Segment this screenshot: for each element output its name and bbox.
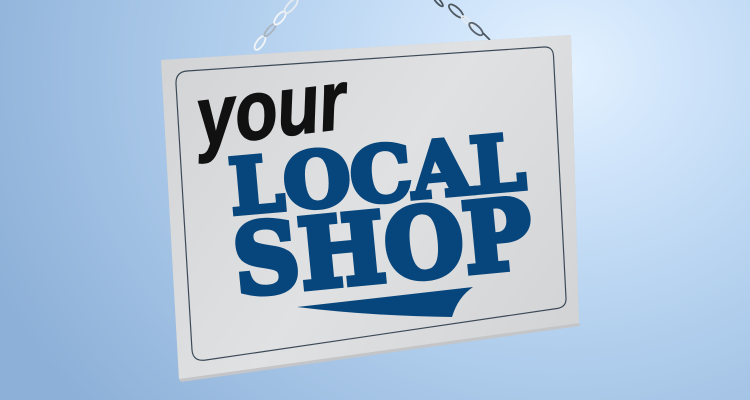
right chain (432, 0, 490, 40)
sign board (161, 35, 580, 382)
board edge (161, 35, 580, 382)
swoosh underline (297, 287, 473, 317)
left chain (253, 0, 300, 52)
board face (161, 35, 579, 379)
word: SHOP: SHOP (228, 177, 537, 318)
word: LOCAL: LOCAL (226, 117, 528, 232)
inner border (176, 47, 566, 360)
word: your: your (187, 52, 355, 164)
